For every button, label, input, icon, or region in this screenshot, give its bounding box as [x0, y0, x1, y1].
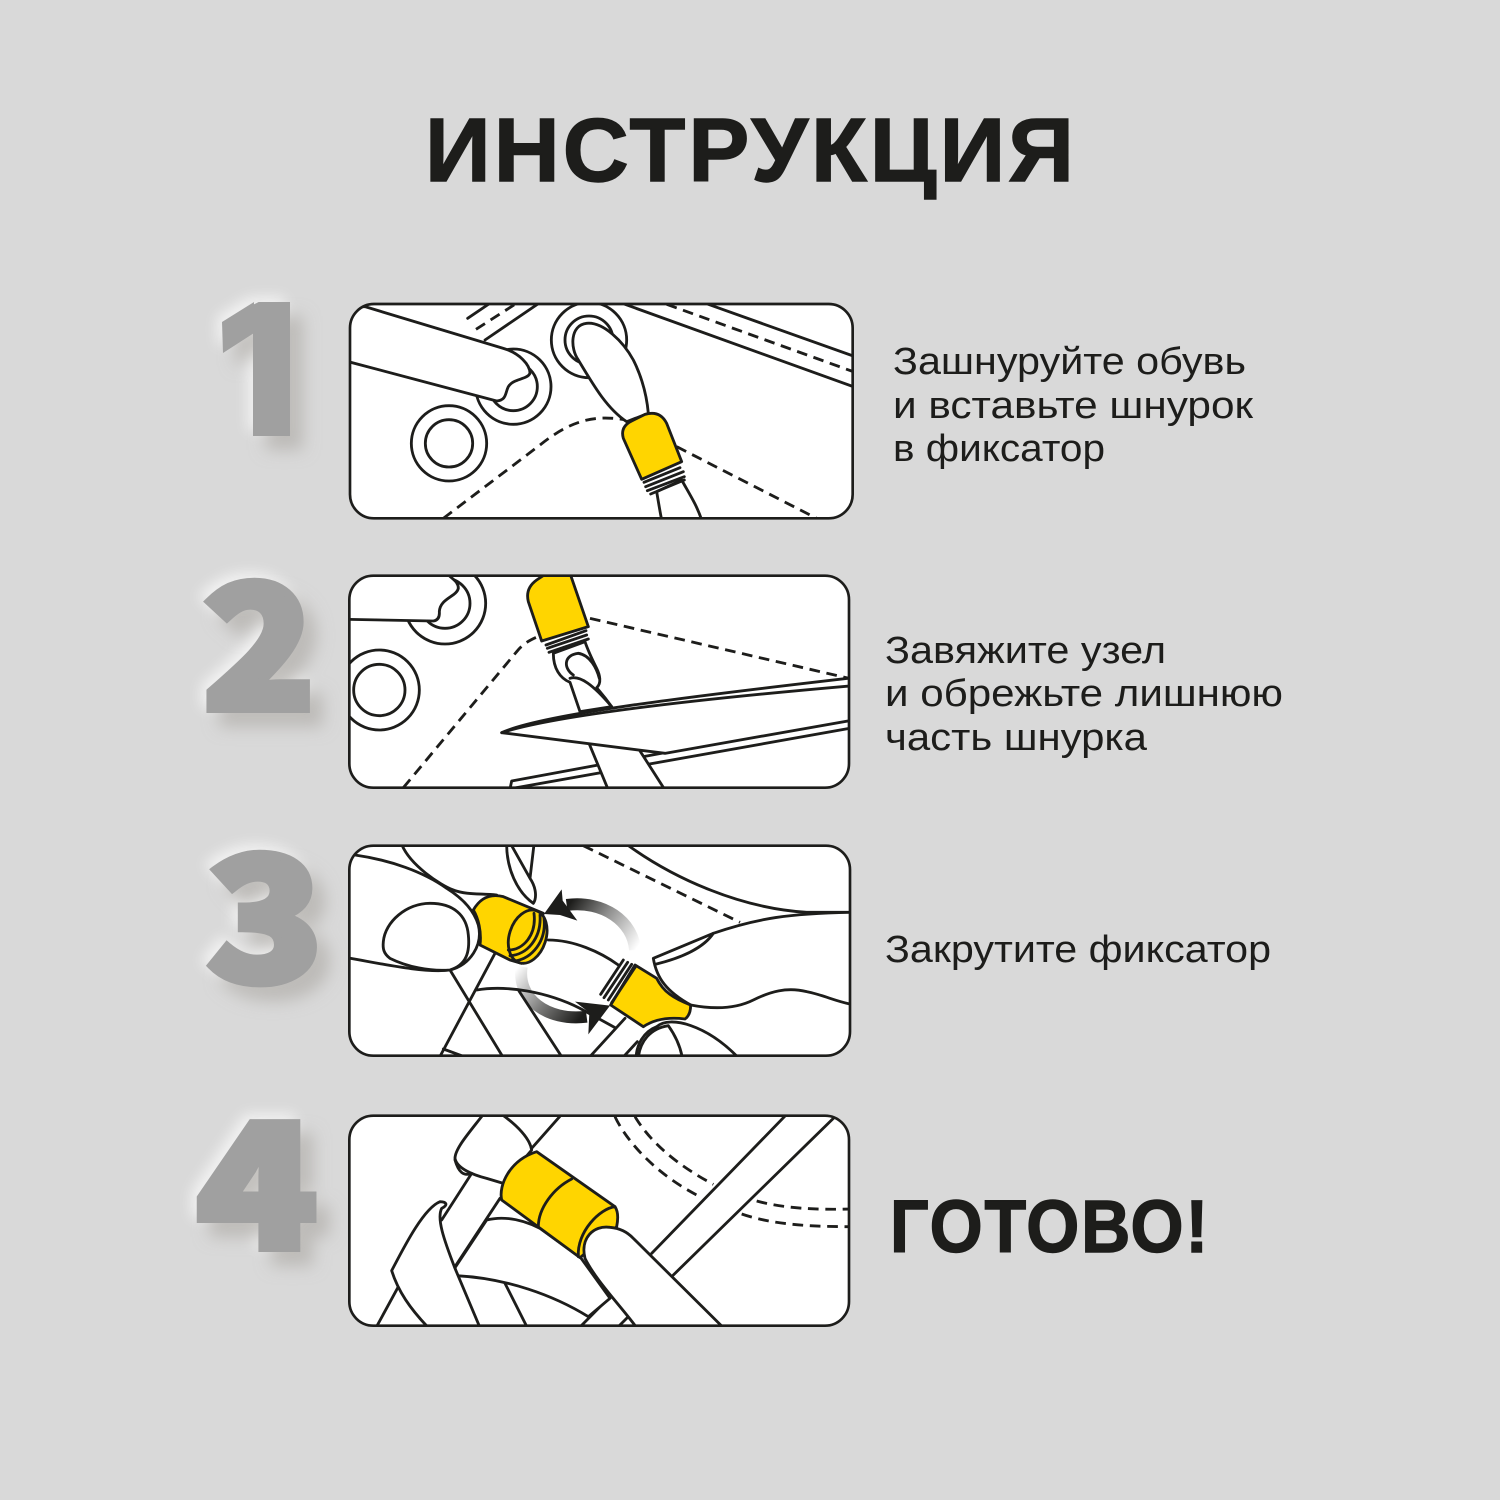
yellow lock	[501, 1152, 618, 1258]
step 2 text: Завяжите узел	[885, 630, 1166, 672]
scissors lower blade	[509, 727, 848, 786]
top fingertip	[507, 844, 536, 903]
step 2 text: и обрежьте лишнюю	[885, 673, 1283, 715]
panel: step 4 illustration	[348, 1114, 850, 1327]
right yellow lock	[611, 965, 691, 1027]
step number 3: 3	[207, 781, 323, 1031]
title: ИНСТРУКЦИЯ	[425, 101, 1077, 201]
step 1 text: в фиксатор	[893, 428, 1105, 470]
step 4 text: ГОТОВО!	[890, 1185, 1210, 1268]
lace and knot	[553, 642, 665, 790]
shoelace through eyelet	[573, 323, 648, 422]
bottom finger	[636, 1022, 738, 1058]
step 1 text: и вставьте шнурок	[893, 385, 1253, 427]
eyelets	[411, 302, 627, 481]
scissors upper blade	[502, 678, 853, 753]
yellow lock cap	[623, 413, 682, 479]
left yellow lock	[473, 896, 554, 968]
step 2 text: часть шнурка	[885, 717, 1148, 759]
step number 1	[214, 294, 309, 456]
panel: step 2 illustration	[348, 574, 850, 789]
yellow lock cap	[528, 573, 588, 641]
right nail line	[655, 933, 713, 964]
lock thread	[644, 468, 684, 494]
finger	[347, 573, 458, 621]
dashed stitching	[403, 618, 849, 788]
panel: step 3 illustration	[348, 844, 852, 1057]
step 1 text	[893, 341, 1254, 470]
fingertip underside	[455, 1160, 472, 1174]
panel: step 1 illustration	[348, 302, 854, 520]
rotation arrow top	[544, 889, 635, 950]
bottom nail	[638, 1026, 682, 1058]
right hand	[653, 912, 852, 1008]
step number 4: 4	[197, 1048, 317, 1298]
front finger	[584, 1227, 723, 1328]
thumb nail	[383, 903, 469, 970]
step 1 text: Зашнуруйте обувь	[893, 341, 1246, 383]
dashed stitching	[615, 1117, 850, 1227]
rotation arrow bottom	[521, 967, 610, 1034]
strap and lace lines	[376, 1114, 833, 1328]
lace end below lock	[657, 480, 702, 520]
eyelets	[350, 577, 488, 732]
left finger	[392, 1202, 480, 1328]
top fingertip	[455, 1114, 532, 1183]
left hand	[347, 855, 479, 971]
finger	[348, 307, 530, 401]
lock thread	[546, 631, 588, 652]
shoe straps and stitching	[443, 304, 853, 518]
right lock thread	[601, 960, 636, 1003]
step number 2: 2	[203, 509, 315, 759]
step 3 text: Закрутите фиксатор	[885, 929, 1271, 971]
step number 1: 1	[217, 232, 322, 482]
hand	[455, 1218, 610, 1317]
step 2 text	[885, 630, 1283, 759]
shoe and lace outlines	[402, 844, 852, 1058]
